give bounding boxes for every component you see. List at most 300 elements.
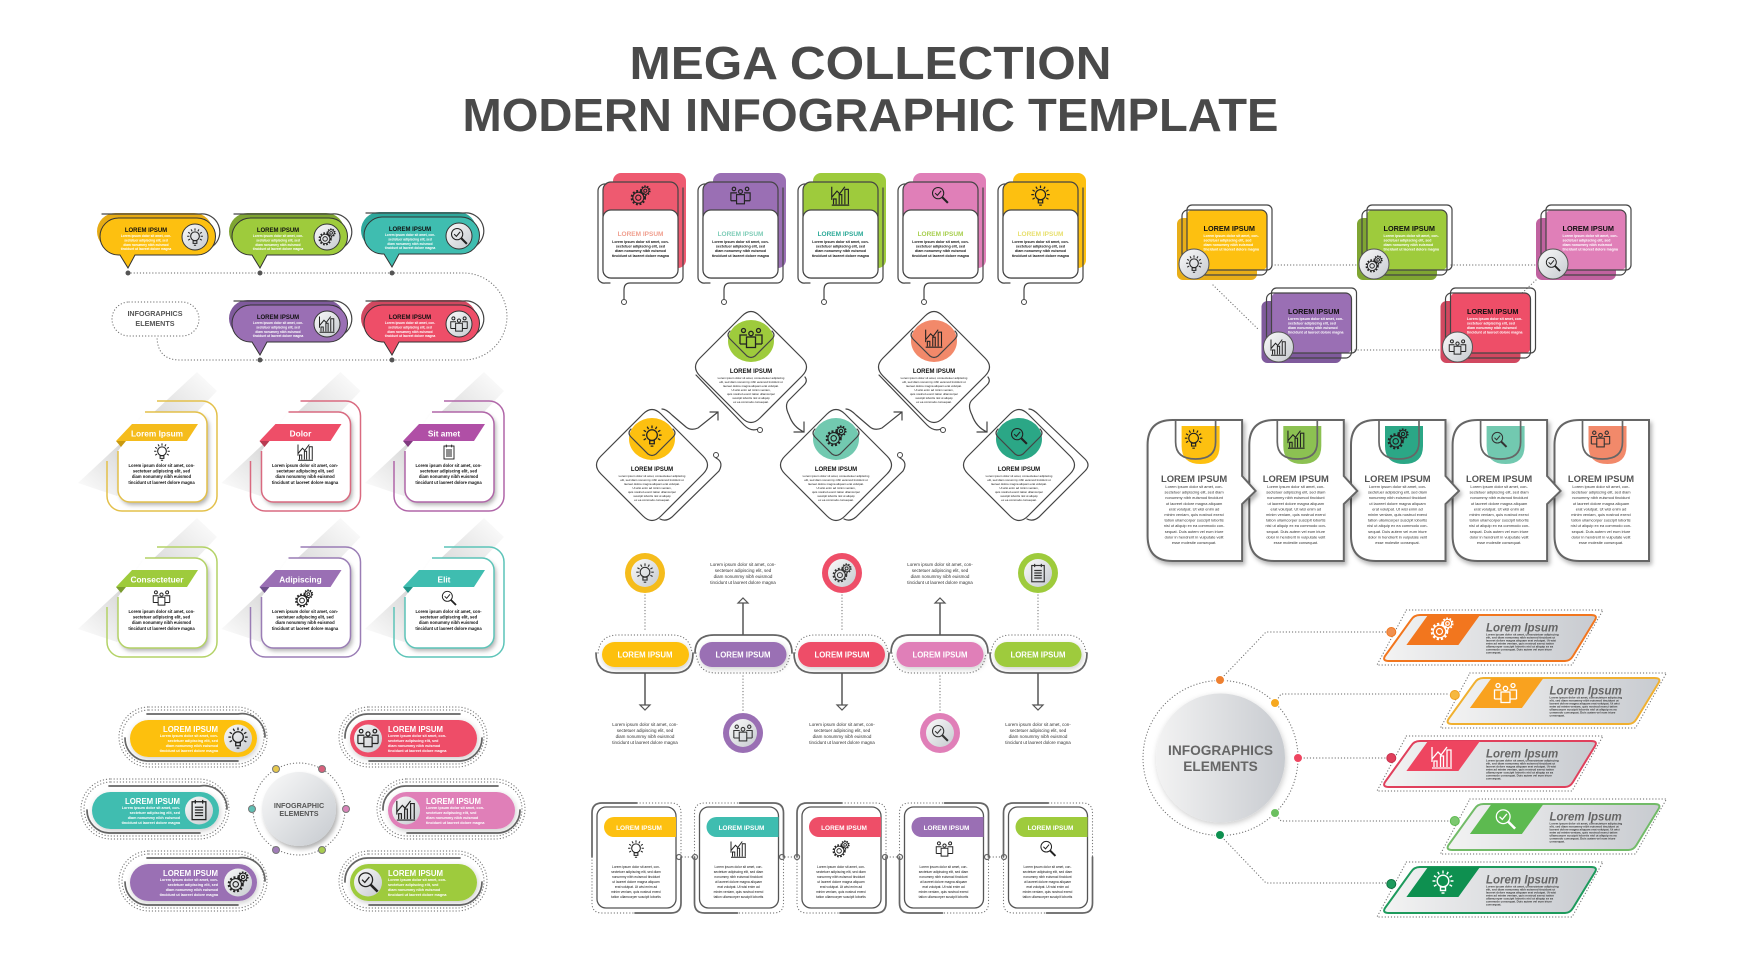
card: green: sectetuer adipiscing elit, sed [816, 244, 865, 248]
tag: seafoam: tation ullamcorper suscipit lobortis [1469, 518, 1529, 523]
card: green: Lorem ipsum dolor sit amet, con- [1384, 234, 1440, 238]
step: yellow: LOREM IPSUM [617, 650, 673, 660]
card: teal: Lorem ipsum dolor sit amet, con- [714, 865, 763, 869]
card: green: sectetuer adipiscing elit, sed diam [1023, 870, 1072, 874]
card: purple: Lorem ipsum dolor sit amet, con- [712, 240, 770, 244]
tag: deep teal: erat volutpat. Ut wisi enim ad [1372, 506, 1423, 511]
banner: green: ullamcorper suscipit lobortis nisl ut aliquip ex ea [1550, 834, 1617, 838]
card: red: sectetuer adipiscing elit, sed [1467, 322, 1515, 326]
square: Consectetuer: Lorem ipsum dolor sit amet, con- [128, 609, 195, 614]
banner: deep green [1377, 862, 1603, 917]
step: yellow: tincidunt ut laoreet dolore magna [612, 740, 678, 745]
hub circle: INFOGRAPHICS [1168, 743, 1273, 758]
card: red [1440, 288, 1536, 363]
panel: radial pills [81, 707, 525, 911]
card: purple: tincidunt ut laoreet dolore magna [1288, 330, 1343, 334]
tag: deep teal: dolor in hendrerit in vulputate velit [1368, 534, 1428, 539]
card: yellow: LOREM IPSUM [1204, 224, 1255, 233]
pill: green: diam nonummy nibh euismod [388, 888, 441, 892]
banner: gold: commodo consequat. Duis autem vel eum iriure [1550, 710, 1616, 714]
card: pink: LOREM IPSUM [1562, 224, 1614, 233]
card: yellow: tincidunt ut laoreet dolore magna [1012, 254, 1070, 258]
tag: deep teal: LOREM IPSUM [1364, 473, 1431, 484]
diamond: upper green: suscipit lobortis nisl ut aliquip [732, 396, 770, 400]
card: red: LOREM IPSUM [821, 825, 867, 832]
card: red: ut laoreet dolore magna aliquam [817, 880, 865, 884]
tag: seafoam: erat volutpat. Ut wisi enim ad [1474, 506, 1524, 511]
card: purple: tincidunt ut laoreet dolore magna [712, 254, 770, 258]
step: yellow [602, 553, 689, 745]
pill: pink: sectetuer adipiscing elit, sed [426, 811, 477, 815]
card: yellow: nonummy nibh euismod tincidunt [612, 875, 660, 879]
card: yellow: sectetuer adipiscing elit, sed [1016, 244, 1065, 248]
pill: teal [81, 779, 229, 839]
square: Lorem ipsum [78, 372, 217, 511]
banner: orange: commodo consequat. Duis autem vel eum iriure [1486, 648, 1552, 652]
step: green: LOREM IPSUM [1010, 650, 1066, 660]
banner: orange: elit, sed diam nonummy nibh euismod tincidunt ut [1486, 636, 1555, 640]
tag: deep teal: sectetuer adipiscing elit, sed diam [1368, 490, 1428, 495]
panel: header cards [598, 173, 1086, 304]
card: yellow [998, 173, 1086, 304]
square: Adipiscing: sectetuer adipiscing elit, sed [276, 614, 334, 620]
panel: stacked colour cards [1177, 205, 1631, 363]
label pill [112, 302, 199, 336]
card: green: erat volutpat. Ut wisi enim ad [1026, 885, 1069, 889]
pill: green: sectetuer adipiscing elit, sed [388, 883, 439, 887]
card: yellow: tation ullamcorper suscipit lobortis [611, 895, 661, 899]
card: pink: sectetuer adipiscing elit, sed [1562, 238, 1610, 242]
pill: teal: sectetuer adipiscing elit, sed [130, 811, 181, 815]
card: teal: LOREM IPSUM [719, 825, 764, 832]
card: green: tincidunt ut laoreet dolore magna [1384, 248, 1439, 252]
diamond: lower seafoam: Lorem ipsum dolor sit amet, consectetuer adipiscing [803, 474, 870, 478]
square: Consectetuer: diam nonummy nibh euismod [132, 620, 192, 625]
hub circle [1143, 680, 1298, 836]
card: yellow: minim veniam, quis nostrud exerci [611, 890, 661, 894]
diamond: lower seafoam: laoreet dolore magna aliquam erat volutpat. [808, 482, 864, 486]
square: Dolor: diam nonummy nibh euismod [275, 474, 335, 479]
square: Lorem ipsum: Lorem Ipsum [131, 428, 183, 438]
diamond: lower yellow: LOREM IPSUM [631, 467, 673, 473]
title: MODERN INFOGRAPHIC TEMPLATE [462, 89, 1278, 141]
card: red: erat volutpat. Ut wisi enim ad [820, 885, 862, 889]
step: purple: LOREM IPSUM [715, 650, 771, 660]
diamond: lower deep green: ex ea commodo consequat. [1001, 498, 1037, 502]
banner: red: elit, sed diam nonummy nibh euismod tincidunt ut [1486, 762, 1555, 766]
diamond: lower seafoam: LOREM IPSUM [815, 467, 857, 473]
pill: purple [119, 851, 267, 911]
card: green: diam nonummy nibh euismod [1384, 243, 1433, 247]
card: red: tincidunt ut laoreet dolore magna [612, 254, 670, 258]
pill: green [339, 851, 487, 911]
bubble: teal [361, 212, 484, 267]
tag: yellow: nonummy nibh euismod tincidunt [1165, 495, 1224, 500]
tag: green: erat volutpat. Ut wisi enim ad [1271, 506, 1321, 511]
card: yellow: Lorem ipsum dolor sit amet, con- [612, 865, 660, 869]
card: yellow: sectetuer adipiscing elit, sed [1204, 238, 1251, 242]
card: green: nonummy nibh euismod tincidunt [1023, 875, 1072, 879]
card: purple: diam nonummy nibh euismod [715, 249, 766, 253]
path nodes [126, 270, 394, 362]
tag: deep teal: nonummy nibh euismod tincidunt [1369, 495, 1427, 500]
square: Adipiscing: diam nonummy nibh euismod [275, 620, 335, 625]
card: red: nonummy nibh euismod tincidunt [817, 875, 865, 879]
banner: deep green: Lorem ipsum dolor sit amet, consectetuer adipiscing [1486, 884, 1559, 888]
card: pink: tincidunt ut laoreet dolore magna [1562, 248, 1618, 252]
bubble: yellow: tincidunt ut laoreet dolore magna [121, 247, 171, 251]
diamond: upper salmon [878, 312, 990, 432]
card: pink: tincidunt ut laoreet dolore magna [912, 254, 970, 258]
diamond: lower seafoam: quis nostrud exerci tation ullamcorper [812, 490, 860, 494]
card: purple [698, 173, 786, 304]
square: Elit: diam nonummy nibh euismod [419, 620, 479, 625]
bubble: purple [229, 300, 352, 355]
pill: yellow: Lorem ipsum dolor sit amet, con- [160, 734, 219, 738]
card: green: sectetuer adipiscing elit, sed [1384, 238, 1431, 242]
bubble: red: diam nonummy nibh euismod [387, 330, 433, 334]
pill: red: diam nonummy nibh euismod [388, 744, 441, 748]
pill: purple: Lorem ipsum dolor sit amet, con- [160, 878, 219, 882]
card: yellow: diam nonummy nibh euismod [1015, 249, 1066, 253]
bubble: yellow: sectetuer adipiscing elit, sed [124, 238, 168, 242]
tag: green [1249, 420, 1357, 561]
label pill: INFOGRAPHICS [127, 309, 183, 318]
card: purple [900, 803, 988, 913]
diamond: lower seafoam: ex ea commodo consequat. [818, 498, 854, 502]
diamond: upper salmon: laoreet dolore magna aliquam erat volutpat. [906, 384, 962, 388]
square: Dolor [222, 372, 360, 511]
card: purple: nonummy nibh euismod tincidunt [919, 875, 968, 879]
card: yellow: sectetuer adipiscing elit, sed diam [611, 870, 661, 874]
bubble: yellow: diam nonummy nibh euismod [123, 243, 169, 247]
pill: yellow [119, 707, 267, 767]
diamond: lower yellow: Ut wisi enim ad minim veniam, [632, 486, 672, 490]
bubble: green: sectetuer adipiscing elit, sed [256, 238, 300, 242]
square: Dolor: Dolor [290, 428, 312, 438]
diamond: upper salmon: LOREM IPSUM [913, 369, 955, 375]
square: Sit amet: sectetuer adipiscing elit, sed [420, 468, 478, 474]
banner: gold: Lorem ipsum dolor sit amet, consectetuer adipiscing [1550, 696, 1622, 700]
banner: orange: ullamcorper suscipit lobortis nisl ut aliquip ex ea [1486, 644, 1554, 648]
square: Sit amet: Lorem ipsum dolor sit amet, con- [415, 463, 482, 468]
pill: teal: diam nonummy nibh euismod [128, 816, 181, 820]
tag: deep teal: Lorem ipsum dolor sit amet, con- [1369, 484, 1427, 489]
bubble: purple: diam nonummy nibh euismod [255, 330, 301, 334]
square: Dolor: tincidunt ut laoreet dolore magna [272, 480, 339, 485]
card: green: Lorem ipsum dolor sit amet, con- [1023, 865, 1072, 869]
tag: deep teal: nisl ut aliquip ex ea commodo con- [1367, 523, 1428, 528]
tag: seafoam: minim veniam, quis nostrud exerci [1469, 512, 1529, 517]
tag: green: minim veniam, quis nostrud exerci [1266, 512, 1326, 517]
step: yellow: Lorem ipsum dolor sit amet, con- [612, 722, 678, 727]
card: green: ut laoreet dolore magna aliquam [1024, 880, 1071, 884]
card: purple: diam nonummy nibh euismod [1288, 326, 1338, 330]
tag: seafoam: sectetuer adipiscing elit, sed diam [1470, 490, 1529, 495]
pill: purple: tincidunt ut laoreet dolore magna [160, 893, 219, 897]
tag: deep teal: esse molestie consequat. [1375, 540, 1420, 545]
square: Sit amet: Sit amet [428, 428, 460, 438]
tag: deep teal: minim veniam, quis nostrud exerci [1368, 512, 1427, 517]
pill: green: LOREM IPSUM [388, 869, 443, 878]
bubble: red: LOREM IPSUM [389, 315, 431, 321]
square: Adipiscing: tincidunt ut laoreet dolore magna [272, 626, 339, 631]
square: Lorem ipsum: Lorem ipsum dolor sit amet, con- [128, 463, 195, 468]
diamond: lower deep green: LOREM IPSUM [998, 467, 1040, 473]
square: Adipiscing: Adipiscing [279, 574, 322, 584]
square: Dolor: sectetuer adipiscing elit, sed [276, 468, 334, 474]
diamond: lower yellow [596, 409, 721, 520]
card: yellow: LOREM IPSUM [616, 825, 662, 832]
tag: seafoam: Lorem ipsum dolor sit amet, con- [1470, 484, 1528, 489]
card: green: tation ullamcorper suscipit lobortis [1023, 895, 1073, 899]
banner: red: Lorem ipsum dolor sit amet, consectetuer adipiscing [1486, 758, 1559, 762]
square: Lorem ipsum: diam nonummy nibh euismod [132, 474, 192, 479]
banner: red: enim ad minim veniam, quis nostrud exerci tation [1486, 768, 1554, 772]
tag: seafoam: nonummy nibh euismod tincidunt [1470, 495, 1529, 500]
step: green: Lorem ipsum dolor sit amet, con- [1005, 722, 1071, 727]
diamond: upper green: laoreet dolore magna aliquam erat volutpat. [723, 384, 779, 388]
card: green: LOREM IPSUM [1028, 825, 1073, 832]
diamond: upper green: ex ea commodo consequat. [733, 400, 769, 404]
card: purple: erat volutpat. Ut wisi enim ad [922, 885, 965, 889]
tag: yellow: tation ullamcorper suscipit lobortis [1164, 518, 1224, 523]
diamond: lower yellow: laoreet dolore magna aliquam erat volutpat. [624, 482, 680, 486]
card: purple: sectetuer adipiscing elit, sed [716, 244, 765, 248]
link dots [676, 854, 1006, 860]
card: yellow: LOREM IPSUM [1018, 231, 1063, 238]
banner: deep green: ullamcorper suscipit lobortis nisl ut aliquip ex ea [1486, 896, 1554, 900]
tag: yellow: LOREM IPSUM [1161, 473, 1227, 484]
tag: salmon: ut laoreet dolore magna aliquam [1573, 501, 1630, 506]
step: red: Lorem ipsum dolor sit amet, con- [809, 722, 875, 727]
pill: green: Lorem ipsum dolor sit amet, con- [388, 878, 447, 882]
label pill: ELEMENTS [135, 319, 175, 328]
card: purple: sectetuer adipiscing elit, sed diam [919, 870, 968, 874]
step: purple: sectetuer adipiscing elit, sed [715, 568, 772, 573]
title: MEGA COLLECTION [630, 37, 1112, 89]
diamond: lower seafoam: elit, sed diam nonummy nibh euismod tincidunt ut [804, 478, 868, 482]
tag: salmon: sequat. Duis autem vel eum iriure [1572, 529, 1631, 534]
diamond: lower deep green: suscipit lobortis nisl ut aliquip [1000, 494, 1038, 498]
card: green: minim veniam, quis nostrud exerci [1023, 890, 1073, 894]
bubble: yellow: Lorem ipsum dolor sit amet, con- [121, 234, 171, 238]
square: Elit: Lorem ipsum dolor sit amet, con- [415, 609, 482, 614]
card: green [1357, 205, 1452, 280]
card: yellow: Lorem ipsum dolor sit amet, con- [1012, 240, 1070, 244]
diamond: lower yellow: quis nostrud exerci tation ullamcorper [628, 490, 676, 494]
step: red [798, 553, 885, 745]
card: red: diam nonummy nibh euismod [1467, 326, 1517, 330]
square: Dolor: Lorem ipsum dolor sit amet, con- [272, 463, 339, 468]
step: green: diam nonummy nibh euismod [1009, 734, 1068, 739]
card: green: diam nonummy nibh euismod [815, 249, 866, 253]
square: Sit amet [365, 372, 504, 511]
banner: deep green: enim ad minim veniam, quis nostrud exerci tation [1486, 894, 1554, 898]
step: pink [896, 562, 984, 753]
tag: yellow: minim veniam, quis nostrud exerci [1164, 512, 1224, 517]
bubble: teal: tincidunt ut laoreet dolore magna [385, 246, 435, 250]
banner: deep green: laoreet dolore magna aliquam erat volutpat. Ut wisi [1486, 890, 1556, 894]
tag: yellow: esse molestie consequat. [1172, 540, 1216, 545]
diamond: lower deep green: laoreet dolore magna aliquam erat volutpat. [991, 482, 1047, 486]
card: pink: Lorem ipsum dolor sit amet, con- [912, 240, 970, 244]
diamond: lower yellow: Lorem ipsum dolor sit amet, consectetuer adipiscing [619, 474, 686, 478]
card: purple: minim veniam, quis nostrud exerci [919, 890, 969, 894]
tag: green: ut laoreet dolore magna aliquam [1268, 501, 1325, 506]
pill: pink: LOREM IPSUM [426, 797, 481, 806]
dotted connectors [1220, 632, 1449, 883]
card: red: LOREM IPSUM [1467, 307, 1518, 316]
tag: yellow: Lorem ipsum dolor sit amet, con- [1165, 484, 1223, 489]
tag: salmon: dolor in hendrerit in vulputate velit [1572, 534, 1631, 539]
card: green: LOREM IPSUM [1384, 224, 1435, 233]
diamond: lower deep green: elit, sed diam nonummy nibh euismod tincidunt ut [987, 478, 1051, 482]
tag: seafoam: LOREM IPSUM [1466, 473, 1532, 484]
card: green: Lorem ipsum dolor sit amet, con- [812, 240, 870, 244]
square: Elit [365, 518, 504, 657]
diamond: lower deep green: Ut wisi enim ad minim veniam, [999, 486, 1039, 490]
card: teal [694, 803, 784, 913]
pill: pink: tincidunt ut laoreet dolore magna [426, 821, 485, 825]
diamond: upper salmon: suscipit lobortis nisl ut aliquip [915, 396, 953, 400]
square: Lorem ipsum: tincidunt ut laoreet dolore magna [128, 480, 195, 485]
pill: yellow: LOREM IPSUM [163, 725, 218, 734]
bubble: red: tincidunt ut laoreet dolore magna [385, 334, 435, 338]
title [462, 37, 1278, 141]
tag: green: Lorem ipsum dolor sit amet, con- [1267, 484, 1325, 489]
banner: deep green: commodo consequat. Duis autem vel eum iriure [1486, 900, 1552, 904]
banner: green: Lorem Ipsum [1550, 812, 1622, 824]
panel: ribbon squares [78, 372, 504, 657]
square: Consectetuer: tincidunt ut laoreet dolore magna [128, 626, 195, 631]
card: yellow: Lorem ipsum dolor sit amet, con- [1204, 234, 1260, 238]
card: purple: sectetuer adipiscing elit, sed [1288, 322, 1336, 326]
pill: purple: LOREM IPSUM [163, 869, 218, 878]
tag: yellow: sequat. Duis autem vel eum iriure [1165, 529, 1224, 534]
tag: salmon: Lorem ipsum dolor sit amet, con- [1572, 484, 1630, 489]
tag: green: sequat. Duis autem vel eum iriure [1266, 529, 1326, 534]
pill: teal: tincidunt ut laoreet dolore magna [122, 821, 181, 825]
diamond: upper salmon: Ut wisi enim ad minim veniam, [914, 388, 954, 392]
diamond: lower deep green: quis nostrud exerci tation ullamcorper [995, 490, 1043, 494]
diamond: upper salmon: elit, sed diam nonummy nibh euismod tincidunt ut [902, 380, 966, 384]
card: red: tation ullamcorper suscipit lobortis [816, 895, 866, 899]
card: red: Lorem ipsum dolor sit amet, con- [612, 240, 670, 244]
panel: speech bubble timeline [97, 212, 507, 362]
bubble: green: LOREM IPSUM [257, 228, 299, 234]
bubble: teal: diam nonummy nibh euismod [387, 242, 433, 246]
diamond: upper salmon: ex ea commodo consequat. [916, 400, 952, 404]
pill: purple: sectetuer adipiscing elit, sed [168, 883, 219, 887]
tag: salmon: esse molestie consequat. [1579, 540, 1623, 545]
pill: red [339, 707, 487, 767]
square: Adipiscing: Lorem ipsum dolor sit amet, con- [272, 609, 339, 614]
tag: yellow: erat volutpat. Ut wisi enim ad [1169, 506, 1219, 511]
step: pink: LOREM IPSUM [912, 650, 968, 660]
bubble: red: Lorem ipsum dolor sit amet, con- [385, 321, 435, 325]
card: red [797, 803, 886, 913]
tag: seafoam: sequat. Duis autem vel eum iriure [1470, 529, 1529, 534]
pill: red: LOREM IPSUM [388, 725, 443, 734]
card: teal: minim veniam, quis nostrud exerci [714, 890, 764, 894]
bubble: purple: sectetuer adipiscing elit, sed [256, 326, 300, 330]
tag: salmon: minim veniam, quis nostrud exerci [1571, 512, 1631, 517]
card: red: tincidunt ut laoreet dolore magna [1467, 330, 1522, 334]
card: yellow: ut laoreet dolore magna aliquam [612, 880, 660, 884]
card: pink [898, 173, 986, 304]
step: green [994, 553, 1082, 745]
card: red: Lorem ipsum dolor sit amet, con- [1467, 317, 1523, 321]
step: purple [700, 562, 786, 753]
diamond: upper green: Lorem ipsum dolor sit amet, consectetuer adipiscing [718, 376, 785, 380]
square: Lorem ipsum: sectetuer adipiscing elit, sed [133, 468, 191, 474]
pill: teal: Lorem ipsum dolor sit amet, con- [122, 806, 181, 810]
tag: yellow: sectetuer adipiscing elit, sed diam [1165, 490, 1224, 495]
step: purple: tincidunt ut laoreet dolore magna [710, 580, 776, 585]
banner: red: consequat. [1486, 776, 1501, 780]
card: green [798, 173, 886, 304]
banner: deep green: Lorem Ipsum [1486, 874, 1558, 886]
tag: seafoam: nisl ut aliquip ex ea commodo con- [1469, 523, 1530, 528]
step: red: sectetuer adipiscing elit, sed [814, 728, 871, 733]
tag: deep teal: tation ullamcorper suscipit lobortis [1368, 518, 1427, 523]
step: purple: diam nonummy nibh euismod [714, 574, 773, 579]
panel: arrow tag cards [1148, 420, 1649, 561]
banner: orange [1377, 610, 1603, 665]
card: pink: Lorem ipsum dolor sit amet, con- [1562, 234, 1619, 238]
panel: linked cards [592, 803, 1092, 913]
diamond: lower seafoam: Ut wisi enim ad minim veniam, [816, 486, 856, 490]
banner: orange: enim ad minim veniam, quis nostrud exerci tation [1486, 642, 1554, 646]
bubble: teal: LOREM IPSUM [389, 227, 431, 233]
card: pink: diam nonummy nibh euismod [1562, 243, 1612, 247]
card: red: Lorem ipsum dolor sit amet, con- [817, 865, 865, 869]
card: teal: sectetuer adipiscing elit, sed diam [714, 870, 763, 874]
card: red: minim veniam, quis nostrud exerci [816, 890, 866, 894]
step: red: LOREM IPSUM [814, 650, 870, 660]
hub nodes [1216, 676, 1302, 840]
card: red: sectetuer adipiscing elit, sed diam [816, 870, 866, 874]
diamond: upper green [696, 312, 806, 432]
bubble: purple: tincidunt ut laoreet dolore magna [253, 334, 303, 338]
banner: orange: consequat. [1486, 650, 1501, 654]
card: yellow [592, 803, 681, 913]
tag: green: sectetuer adipiscing elit, sed diam [1266, 490, 1326, 495]
dotted path [128, 273, 507, 360]
banner: red [1377, 736, 1603, 791]
card: pink: sectetuer adipiscing elit, sed [916, 244, 965, 248]
dotted outlines [598, 635, 1086, 673]
bubble: green: diam nonummy nibh euismod [255, 243, 301, 247]
panel: hub and slanted banners [1143, 610, 1666, 917]
tag: salmon: nisl ut aliquip ex ea commodo con- [1571, 523, 1632, 528]
pill: red: sectetuer adipiscing elit, sed [388, 739, 439, 743]
diamond: lower deep green [964, 409, 1088, 520]
pill: purple: diam nonummy nibh euismod [166, 888, 219, 892]
banner: gold: enim ad minim veniam, quis nostrud exerci tation [1550, 704, 1618, 708]
bubble: yellow [97, 213, 220, 268]
step: pink: tincidunt ut laoreet dolore magna [907, 580, 973, 585]
card: red: LOREM IPSUM [618, 231, 663, 238]
step: red: tincidunt ut laoreet dolore magna [809, 740, 875, 745]
square: Consectetuer: Consectetuer [130, 574, 184, 584]
pill: yellow: tincidunt ut laoreet dolore magna [160, 749, 219, 753]
card: yellow [1177, 205, 1272, 280]
bubble: green: tincidunt ut laoreet dolore magna [253, 247, 303, 251]
card: red: diam nonummy nibh euismod [615, 249, 666, 253]
tag: salmon: LOREM IPSUM [1568, 473, 1634, 484]
